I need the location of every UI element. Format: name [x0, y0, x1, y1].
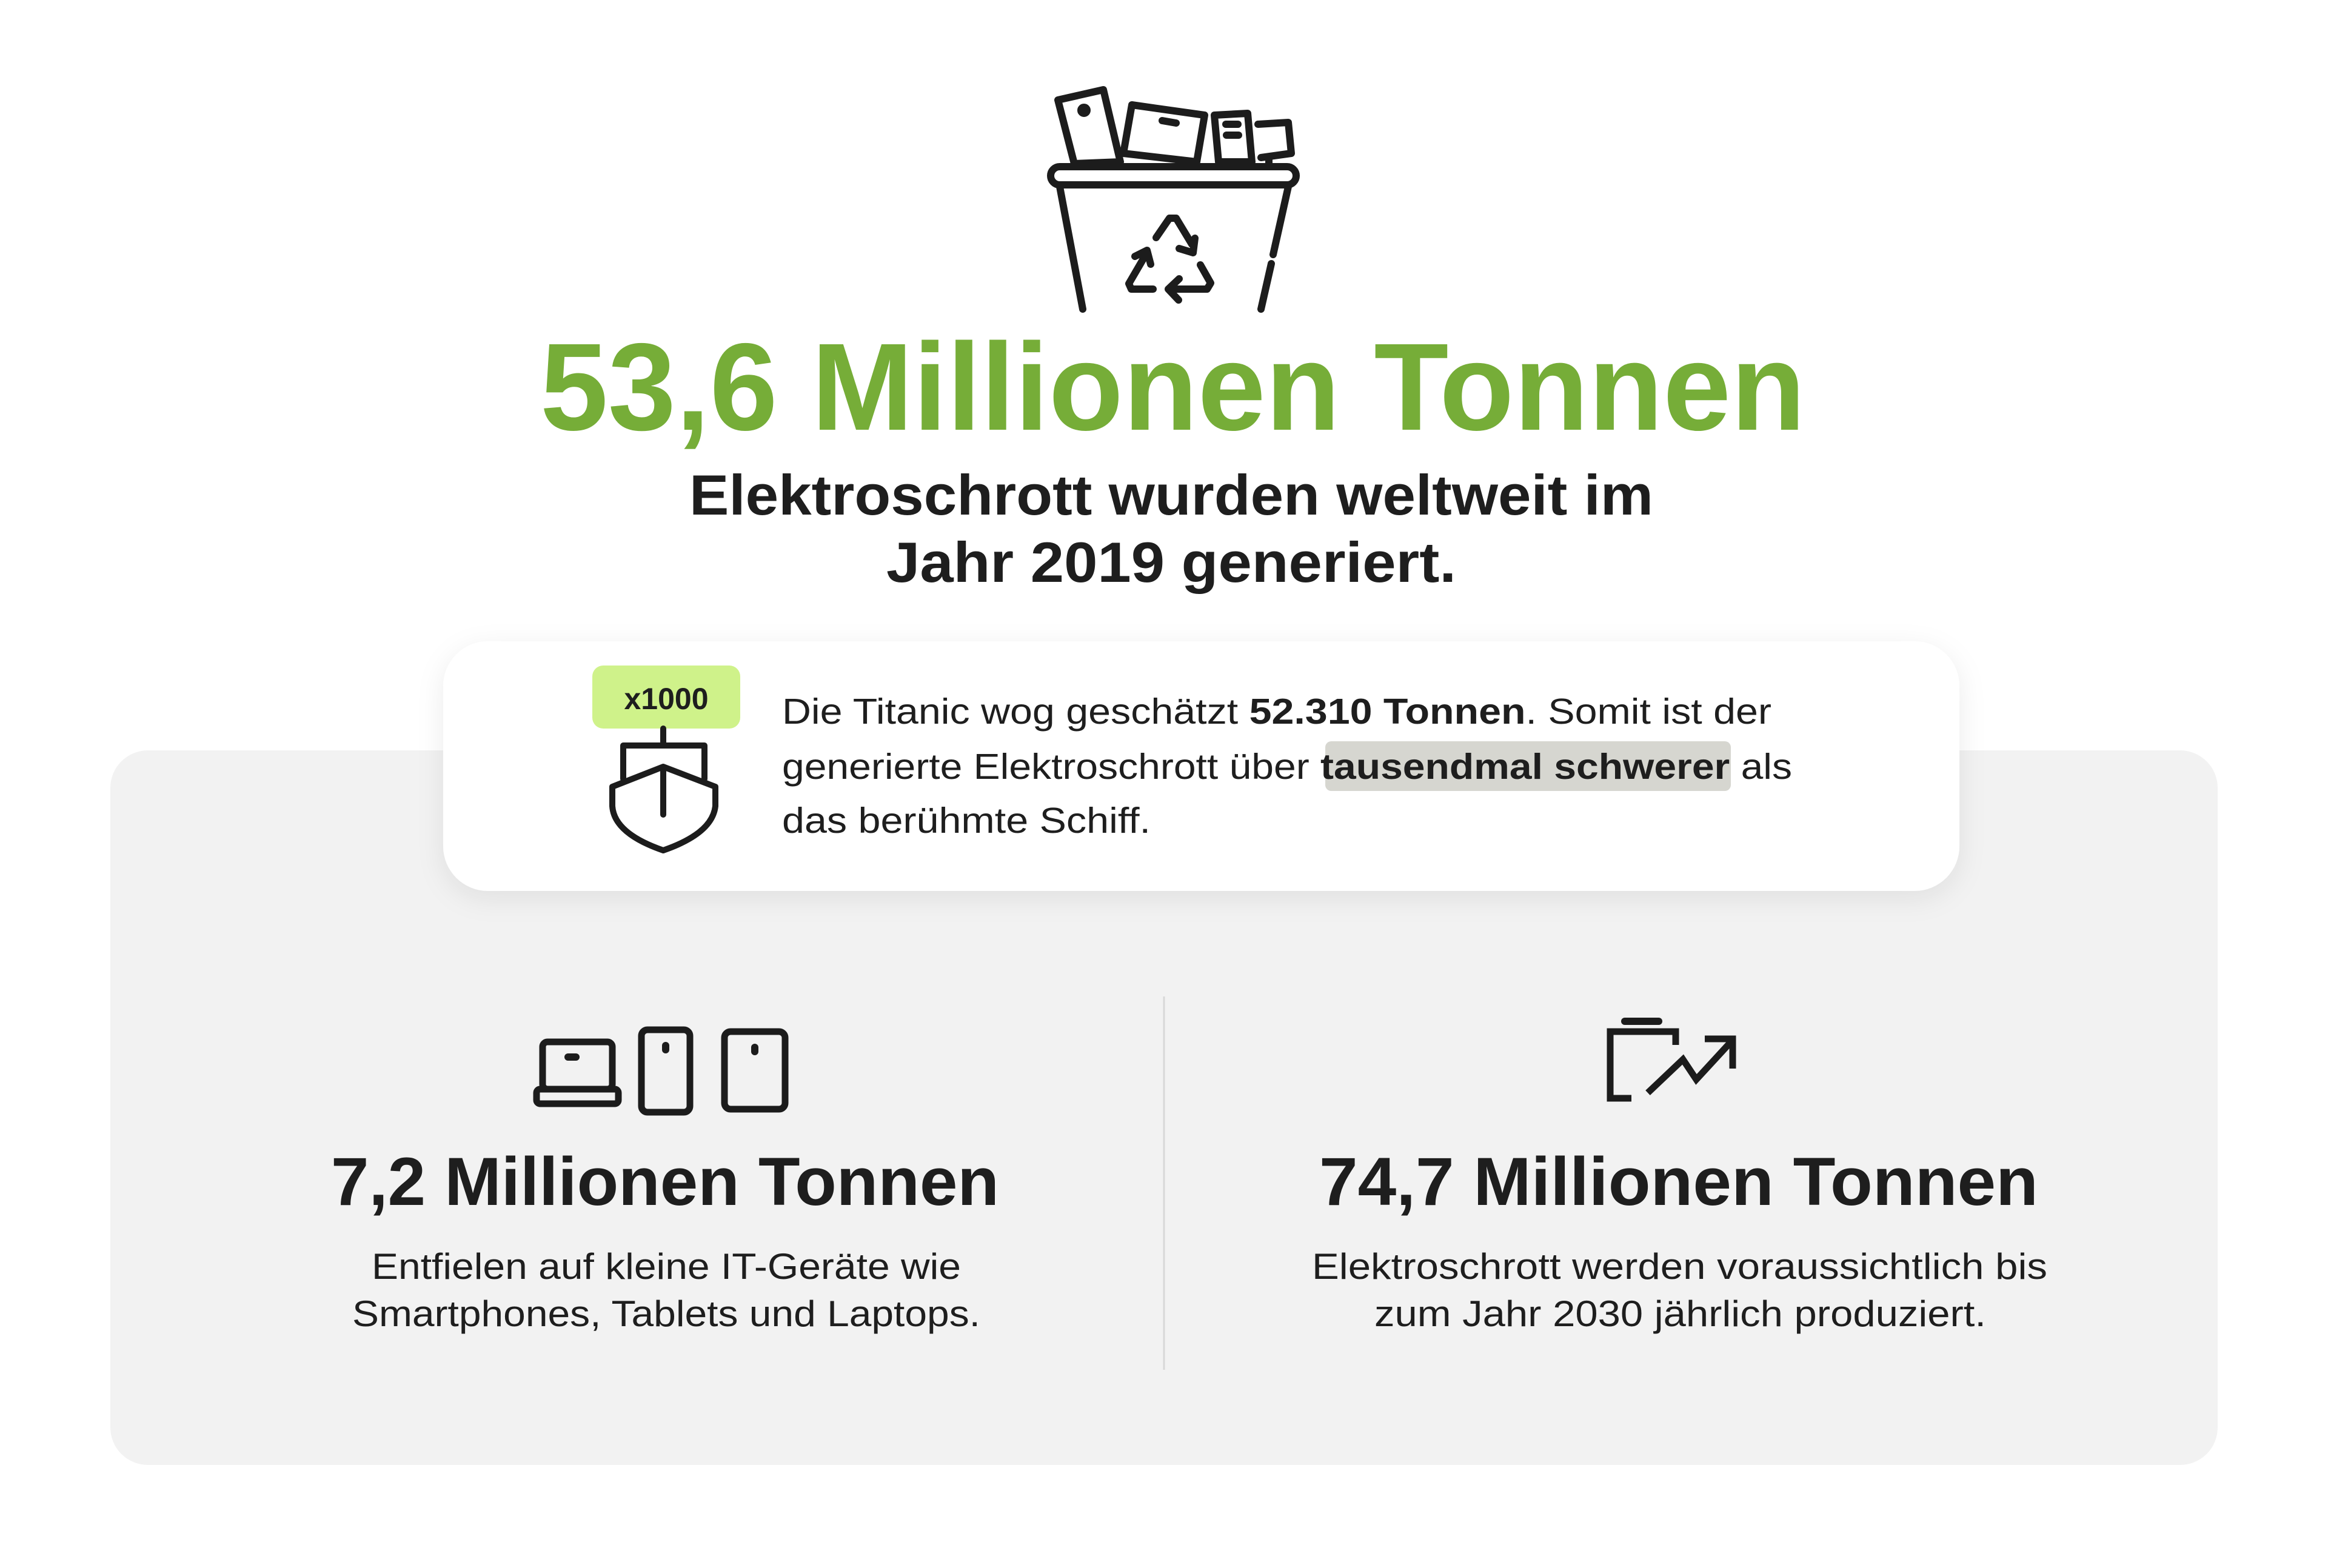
stat heading: 7,2 Millionen Tonnen	[331, 1144, 999, 1219]
panel: titanic comparison card	[443, 641, 1959, 891]
panel: gray background	[110, 750, 2218, 1465]
subtitle: Jahr 2019 generiert.	[886, 530, 1456, 594]
panel: forecast 2030	[1312, 1021, 2047, 1334]
subtitle: Elektroschrott wurden weltweit im	[689, 463, 1653, 527]
highlight	[1325, 741, 1731, 791]
card text	[782, 692, 1792, 841]
badge: x1000	[592, 666, 740, 729]
icon: bin with rising arrow	[1610, 1021, 1733, 1098]
badge: x1000: x1000	[624, 682, 709, 716]
stat description: Elektroschrott werden voraussichtlich bis	[1312, 1246, 2047, 1287]
stat description: Entfielen auf kleine IT-Geräte wie	[372, 1246, 961, 1287]
stat description: zum Jahr 2030 jährlich produziert.	[1374, 1293, 1986, 1334]
stat description	[352, 1246, 980, 1334]
stat description: Smartphones, Tablets und Laptops.	[352, 1293, 980, 1334]
icon: ship	[612, 729, 715, 850]
card text: Die Titanic wog geschätzt 52.310 Tonnen . Somit ist der	[782, 692, 1771, 732]
divider	[1163, 996, 1165, 1370]
subtitle	[689, 463, 1653, 594]
stat heading: 74,7 Millionen Tonnen	[1319, 1144, 2038, 1219]
panel: small IT devices	[331, 1030, 999, 1334]
card text: das berühmte Schiff.	[782, 801, 1151, 841]
icon: recycling bin with devices	[1051, 90, 1296, 309]
title: 53,6 Millionen Tonnen	[540, 318, 1805, 456]
icon: laptop, phone, tablet	[537, 1030, 785, 1112]
card text: generierte Elektroschrott über tausendmal schwerer als	[782, 747, 1792, 787]
stat description	[1312, 1246, 2047, 1334]
